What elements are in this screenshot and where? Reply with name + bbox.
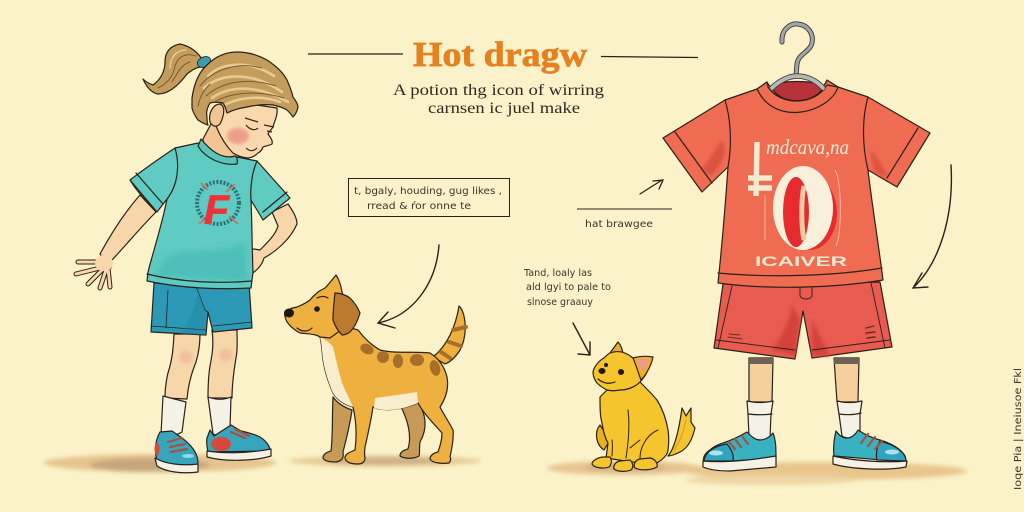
girl: hair — [192, 52, 298, 125]
title rule: left — [308, 53, 403, 55]
girl: right shoe — [207, 425, 271, 460]
girl: blush — [227, 128, 249, 144]
outfit: socks — [747, 401, 862, 440]
girl: face — [216, 100, 277, 158]
outfit: right shoe — [833, 430, 907, 469]
dog: sitting ear near — [633, 356, 653, 380]
dog: far front leg — [323, 397, 352, 462]
dog: chest — [320, 337, 353, 407]
note text: small dog: Tand, loaly las — [523, 268, 592, 279]
dog: sitting tail — [668, 408, 695, 456]
girl: right arm and hand — [238, 204, 297, 276]
title rule: right — [601, 56, 698, 58]
girl illustration — [76, 44, 298, 473]
note text: small dog — [523, 268, 611, 308]
subtitle: carnsen ic juel make — [428, 100, 580, 117]
dog: sitting paws — [592, 457, 657, 471]
vertical edge text: Ioqe Pia | Ineiusoe Fkl — [1013, 368, 1024, 490]
outfit: shirt collar — [757, 82, 838, 112]
girl: shirt logo — [197, 182, 239, 233]
outfit on hanger — [663, 24, 930, 471]
label rule — [577, 208, 672, 210]
dog: sitting body — [600, 382, 669, 463]
dog: mouth and brow — [297, 296, 328, 331]
dog: sitting far haunch — [597, 425, 610, 450]
girl: left hand — [76, 255, 113, 288]
arrow: small up-right — [640, 180, 663, 194]
note text: small dog: slnose graauy — [527, 297, 593, 308]
dog: sitting yellow — [592, 342, 695, 471]
outfit: shorts — [714, 282, 892, 359]
outfit: t-shirt — [663, 80, 930, 287]
girl: neck — [203, 122, 240, 165]
girl: eyes and mouth — [245, 118, 274, 151]
hanger hook — [782, 24, 812, 76]
dog: body — [320, 325, 453, 464]
title: Hot dragw — [413, 35, 588, 74]
girl: knee shading — [179, 349, 233, 363]
girl: hair tie — [196, 55, 212, 69]
dog: sitting ear far — [610, 342, 623, 353]
shirt graphic: mdcava,na — [766, 135, 849, 159]
outfit: shirt inner neck — [771, 82, 824, 101]
outfit: left shoe — [703, 432, 776, 471]
arrow: note to small dog — [573, 323, 590, 355]
dog: spots — [359, 342, 442, 377]
dog: nose and eye — [284, 306, 320, 318]
dog: sitting face — [598, 363, 624, 375]
girl: t-shirt — [130, 139, 290, 289]
girl: ear — [210, 104, 224, 126]
outfit: legs — [749, 358, 859, 402]
subtitle — [393, 82, 604, 117]
girl: shirt logo: F — [204, 187, 230, 233]
label: shirt note: hat brawgee — [585, 219, 653, 230]
shirt graphic: ICAIVER — [755, 253, 847, 269]
subtitle: A potion thg icon of wirring — [393, 82, 604, 99]
arrow: right curved — [913, 165, 951, 288]
ground shadow: girl — [44, 454, 481, 472]
dog: belly — [374, 392, 418, 410]
outfit: sock tops — [749, 358, 859, 364]
girl: left shoe — [154, 431, 198, 473]
girl: legs — [165, 330, 237, 399]
hanger shoulders — [772, 76, 823, 88]
dog: tail — [433, 306, 466, 364]
dog: sitting leg lines — [612, 410, 658, 458]
dog: sitting head — [593, 352, 647, 391]
girl: ponytail — [143, 44, 204, 94]
dog: floppy ear — [333, 293, 360, 335]
girl: shorts — [151, 283, 252, 335]
callout box: dog note — [348, 178, 510, 216]
girl: left arm — [100, 195, 156, 268]
arrow: callout to dog — [378, 245, 439, 328]
callout box: dog note: t, bgaly, houding, gug likes , — [354, 186, 502, 197]
ground shadow: right side — [547, 461, 967, 485]
note text: small dog: ald lgyi to pale to — [526, 282, 611, 293]
dog: standing — [284, 275, 466, 464]
girl: socks — [161, 396, 231, 435]
dog: far hind leg — [400, 402, 425, 458]
shirt graphic — [748, 135, 849, 269]
callout box: dog note: rread & ŕor onne te — [367, 200, 471, 212]
dog: head — [285, 275, 352, 338]
dog: sitting mouth — [598, 379, 615, 383]
